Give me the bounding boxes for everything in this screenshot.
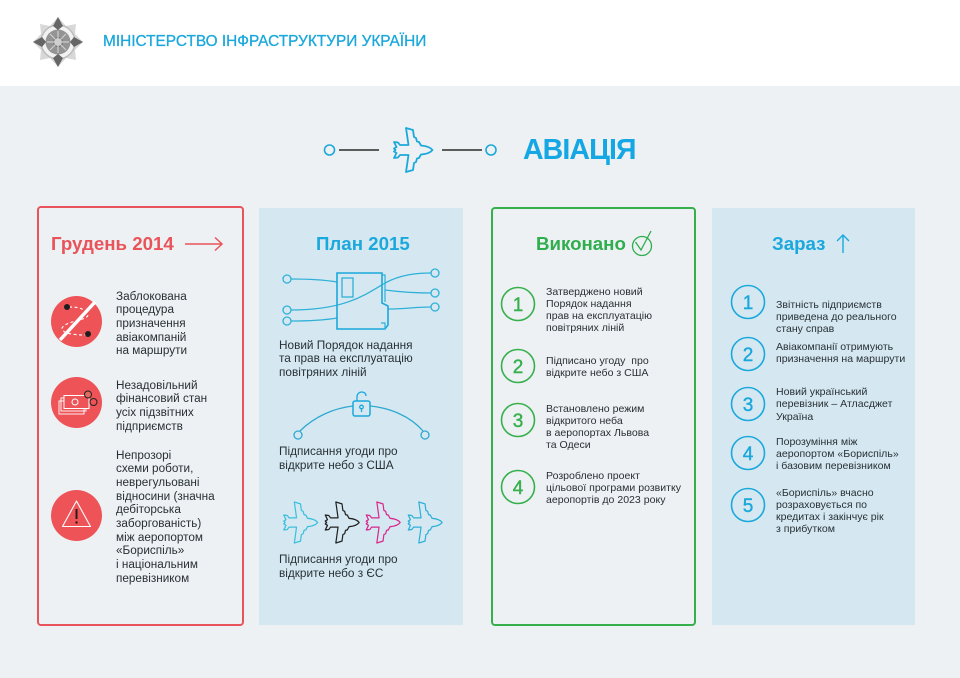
icon: document with routes [282,268,440,330]
section heading: title: АВІАЦІЯ [523,134,636,166]
icon: ministry emblem [33,17,83,67]
panel: Plan 2015 [259,208,463,625]
text: open sky USA: Підписання угоди про відкрите небо з США [279,444,398,472]
text: now 2: Авіакомпанії отримують призначення на маршрути [776,340,905,365]
text: opaque schemes: Непрозорі схеми роботи, неврегульовані відносини (значна дебіторська заборгованість) між аеропортом «Бориспіль» і національним перевізником [116,448,215,585]
text: done 3: Встановлено режим відкритого неба в аеропортах Львова та Одеси [546,402,649,451]
number badges: Now: 2 [743,345,753,366]
heading: Done: Виконано [536,233,626,254]
text: blocked procedure: Заблокована процедура призначення авіакомпаній на маршрути [116,290,187,357]
text: done 4: Розроблено проект цільової програми розвитку аеропортів до 2023 року [546,470,681,506]
icon: row of planes [283,501,443,544]
icon: arrow right [185,237,223,251]
panel: Done [490,206,696,626]
number badges: Now: 4 [743,444,754,465]
section heading: aviation icon [324,127,497,173]
panel: December 2014 [37,206,244,626]
header title: МІНІСТЕРСТВО ІНФРАСТРУКТУРИ УКРАЇНИ [103,32,426,50]
number badges: Done [500,286,536,504]
panel: Now [712,208,915,625]
number badges: Done: 4 [513,478,524,499]
text: now 1: Звітність підприємств приведена до реального стану справ [776,298,897,335]
text: financial state: Незадовільний фінансовий стан усіх підзвітних підприємств [116,378,207,433]
icon: blocked route [51,296,102,347]
number badges: Now: 5 [743,496,753,517]
number badges: Now: 3 [743,395,753,416]
text: now 4: Порозуміння між аеропортом «Бориспіль» і базовим перевізником [776,436,899,472]
text: open sky EU: Підписання угоди про відкрите небо з ЄС [279,552,398,580]
text: now 3: Новий український перевізник – Атласджет Україна [776,386,892,423]
text: done 2: Підписано угоду про відкрите небо з США [546,355,649,379]
number badges: Done: 3 [513,411,523,432]
number badges: Now [730,284,766,522]
text: new procedure: Новий Порядок надання та прав на експлуатацію повітряних ліній [279,338,413,379]
text: now 5: «Бориспіль» вчасно розраховується по кредитах і закінчує рік з прибутком [776,486,884,535]
heading: Plan 2015: План 2015 [316,233,410,254]
number badges: Now: 1 [743,293,753,314]
heading: Now: Зараз [772,233,825,254]
icon: money [51,377,102,428]
text: done 1: Затверджено новий Порядок надання прав на експлуатацію повітряних ліній [546,286,652,334]
header band [0,0,960,86]
icon: check circle [632,230,652,256]
icon: arrow up [836,234,850,253]
number badges: Done: 2 [513,357,523,378]
icon: warning [51,490,102,541]
heading: December 2014: Грудень 2014 [51,233,174,254]
icon: padlock on arc [293,391,430,440]
number badges: Done: 1 [513,295,523,316]
